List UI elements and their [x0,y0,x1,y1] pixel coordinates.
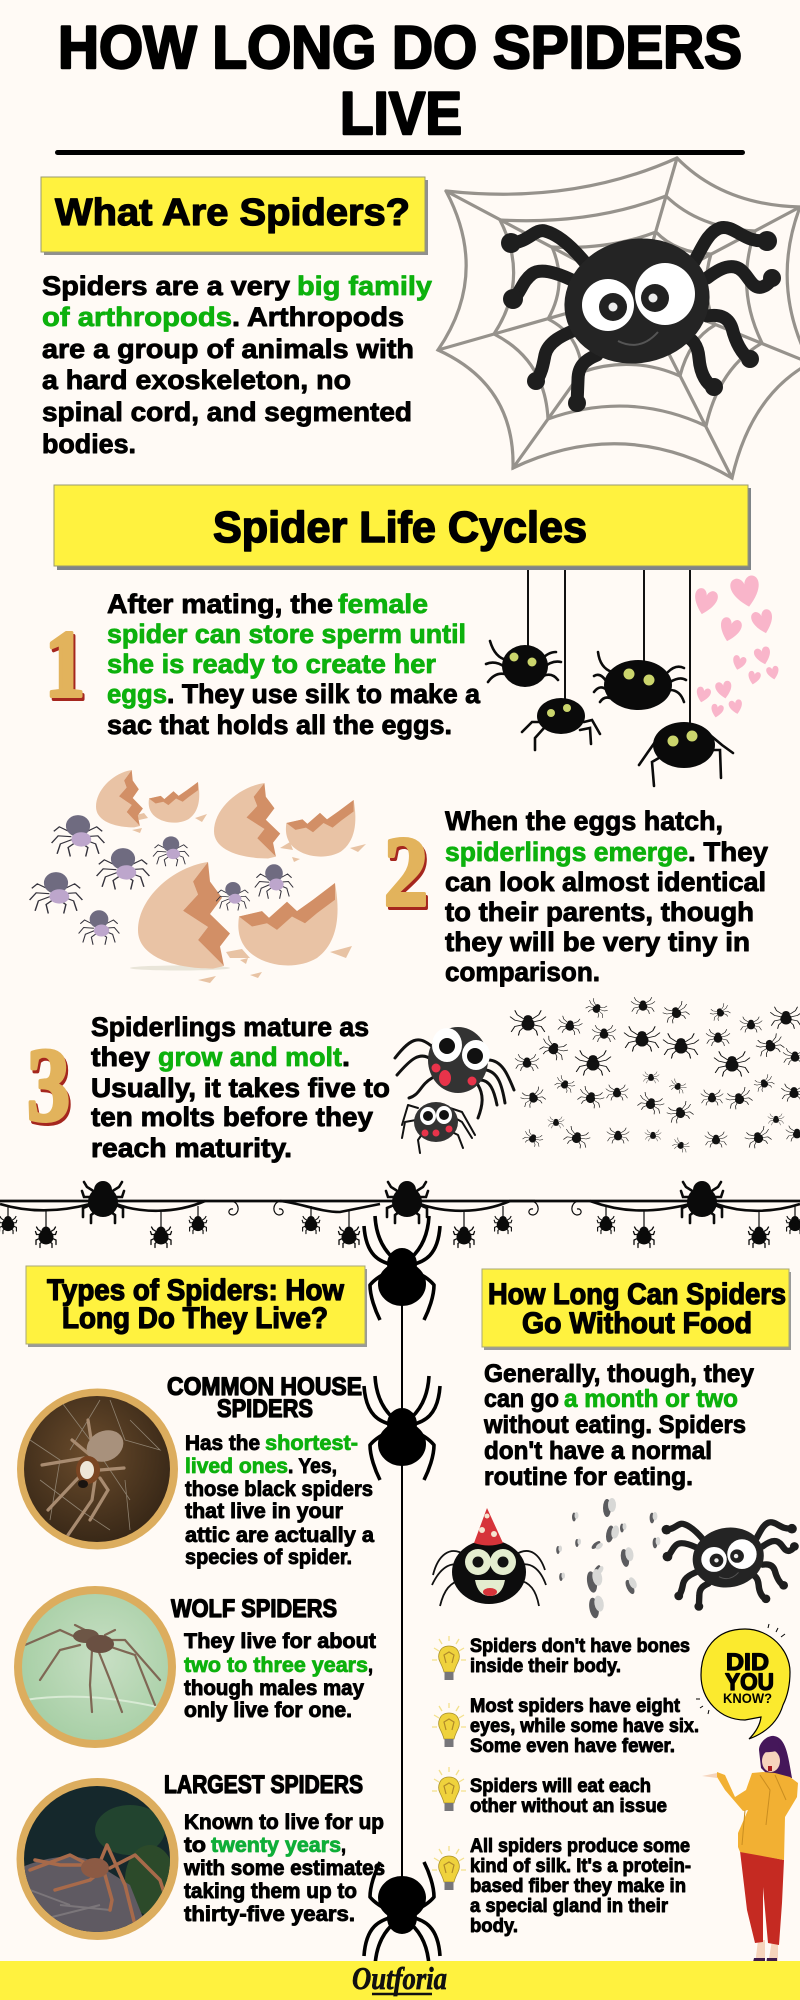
panel: spider life cycles [0,485,800,2000]
text block: step 3 [91,1012,390,1163]
text block: step 3: ten molts before they [91,1102,373,1132]
text block: definition: big family [297,271,432,301]
heading: spider life cycles [54,485,751,570]
panel: types of spiders [14,1266,385,1940]
text block: step 1: sac that holds all the eggs. [107,710,452,740]
name: largest spiders: LARGEST SPIDERS [164,1771,363,1799]
text block: step 1 [107,589,481,740]
species: largest spiders [15,1771,385,1940]
fact 4: body. [470,1916,518,1937]
text: house spider lifespan: . Yes, [288,1455,337,1478]
callout: did you know bubble [696,1624,790,1739]
name: common house spiders: SPIDERS [217,1395,313,1423]
text: wolf spider lifespan: two to three years [184,1654,368,1677]
fact 2 [432,1696,699,1757]
text: house spider lifespan: that live in your [185,1500,343,1523]
step 2 [30,770,768,987]
text: house spider lifespan: shortest- [265,1432,358,1455]
fact 1 [432,1636,690,1680]
baby spiders [30,815,293,945]
text block: without food: routine for eating. [484,1463,693,1491]
icon: pink hearts [691,574,780,719]
heading: what are spiders: What Are Spiders? [55,192,410,234]
icon: flies [556,1498,660,1619]
icon: cartoon spider [501,225,781,412]
text: large spider lifespan: Known to live for up [184,1811,384,1834]
icon: two cartoon spiders [395,1027,514,1153]
photo: large spider [15,1778,178,1940]
step 3 [27,997,800,1163]
illustration: woman pointing [702,1736,798,1968]
text block: definition: . Arthropods [232,302,404,332]
callout: did you know bubble: YOU [725,1669,774,1696]
title: HOW LONG DO SPIDERS [58,14,742,81]
text: wolf spider lifespan: , [368,1654,373,1677]
icon: hanging spiders [486,570,733,786]
fact 4 [432,1836,691,1937]
photo: wolf spider [14,1586,176,1748]
icon: small cartoon spider [662,1521,799,1611]
number 1: 1 [45,611,85,717]
text: large spider lifespan: to [184,1834,206,1857]
callout: did you know bubble: DID [726,1649,769,1676]
number 3: 3 [29,1029,72,1146]
text block: step 3: Spiderlings mature as [91,1012,369,1042]
text: large spider lifespan: with some estimates [183,1857,385,1880]
fact 2: Most spiders have eight [470,1696,681,1717]
text: large spider lifespan [183,1811,385,1926]
text block: without food: without eating. Spiders [483,1411,746,1439]
fact 4: based fiber they make in [470,1876,686,1897]
text block: definition: a hard exoskeleton, no [42,365,351,395]
heading: spider life cycles: Spider Life Cycles [213,503,587,552]
text block: without food: a month or two [564,1385,738,1413]
fact 4: All spiders produce some [470,1836,690,1857]
heading: types of spiders: Types of Spiders: How [47,1274,345,1307]
text: house spider lifespan: species of spider. [185,1546,352,1569]
text: house spider lifespan: lived ones [185,1455,288,1478]
text block: step 2: When the eggs hatch, [445,806,723,836]
name: common house spiders [167,1373,362,1423]
text: house spider lifespan [185,1432,374,1569]
step 1 [45,570,780,786]
text: house spider lifespan: attic are actually a [185,1524,374,1547]
logo: Outforia: Outforia [352,1960,447,1996]
text block: step 2: to their parents, though [445,897,754,927]
text block: definition: are a group of animals with [42,334,414,364]
text block: step 3: . [342,1042,350,1072]
number 2: 2 [386,819,430,930]
text block: definition [42,271,432,459]
text block: step 1: female [338,589,428,619]
text block: without food: Generally, though, they [484,1360,754,1388]
text: house spider lifespan: Has the [185,1432,260,1455]
text: wolf spider lifespan [184,1630,376,1722]
name: common house spiders: COMMON HOUSE [167,1373,362,1401]
heading: what are spiders [41,177,428,255]
fact 4: a special gland in their [470,1896,669,1917]
text block: step 3: they [91,1042,150,1072]
fact 4: kind of silk. It's a protein- [470,1856,691,1877]
panel: what are spiders [41,158,800,478]
species: wolf spiders [14,1586,376,1748]
number 3: 3 [27,1026,70,1143]
title [58,14,742,147]
text: wolf spider lifespan: only live for one. [184,1699,352,1722]
text block: step 2 [445,806,768,987]
text: wolf spider lifespan: They live for about [184,1630,376,1653]
text block: step 1: After mating, the [107,589,333,619]
text: large spider lifespan: taking them up to [184,1880,357,1903]
text block: step 3: grow and molt [158,1042,342,1072]
text block: step 2: they will be very tiny in [445,927,750,957]
fact 3: Spiders will eat each [470,1776,651,1797]
panel: how long without food [432,1269,799,1968]
fact 3 [432,1767,667,1817]
text: large spider lifespan: twenty years [211,1834,341,1857]
number 1: 1 [47,614,87,720]
text block: definition: Spiders are a very [42,271,290,301]
icon: spider web [438,158,800,478]
divider: spider garland [0,1181,800,1248]
text block: step 1: spider can store sperm until [107,619,466,649]
fact 1: Spiders don't have bones [470,1636,690,1657]
text: house spider lifespan: those black spiders [185,1478,373,1501]
name: wolf spiders: WOLF SPIDERS [171,1595,337,1623]
fact 1: inside their body. [470,1656,621,1677]
text block: without food: can go [484,1385,559,1413]
footer bar [0,1961,800,2000]
text block: step 1: she is ready to create her [107,649,436,679]
photo: house spider [17,1388,178,1550]
species: common house spiders [17,1373,374,1569]
heading: without food: Go Without Food [522,1307,752,1340]
heading: types of spiders [26,1266,367,1347]
fact 2: eyes, while some have six. [470,1716,699,1737]
text block: step 3: reach maturity. [91,1133,292,1163]
number 2: 2 [384,816,428,927]
centre thread with hanging spiders [364,1216,440,1966]
heading: types of spiders: Long Do They Live? [62,1302,328,1335]
illustration: hatched eggs [30,770,366,983]
list: did you know facts [432,1636,699,1937]
text: large spider lifespan: , [341,1834,346,1857]
text block: definition: bodies. [42,429,136,459]
text block: step 2: can look almost identical [445,867,766,897]
text block: step 2: comparison. [445,957,600,987]
fact 2: Some even have fewer. [470,1736,675,1757]
text block: step 2: spiderlings emerge [445,837,688,867]
text block: definition: spinal cord, and segmented [42,397,412,427]
illustration: swarm of spiders [510,997,800,1154]
text: wolf spider lifespan: though males may [184,1677,364,1700]
text block: step 3: Usually, it takes five to [91,1073,390,1103]
icon: party spider [432,1508,546,1606]
fact 3: other without an issue [470,1796,667,1817]
text: large spider lifespan: thirty-five years. [184,1903,355,1926]
text block: step 1: . They use silk to make a [167,679,481,709]
text block: step 2: . They [688,837,768,867]
text block: without food: don't have a normal [484,1437,712,1465]
text block: without food [483,1360,754,1491]
title: LIVE [340,80,462,147]
text block: step 1: eggs [107,679,167,709]
egg shards and shadows [130,813,366,983]
heading: without food [482,1269,791,1350]
text block: definition: of arthropods [42,302,232,332]
callout: did you know bubble: KNOW? [723,1690,772,1706]
